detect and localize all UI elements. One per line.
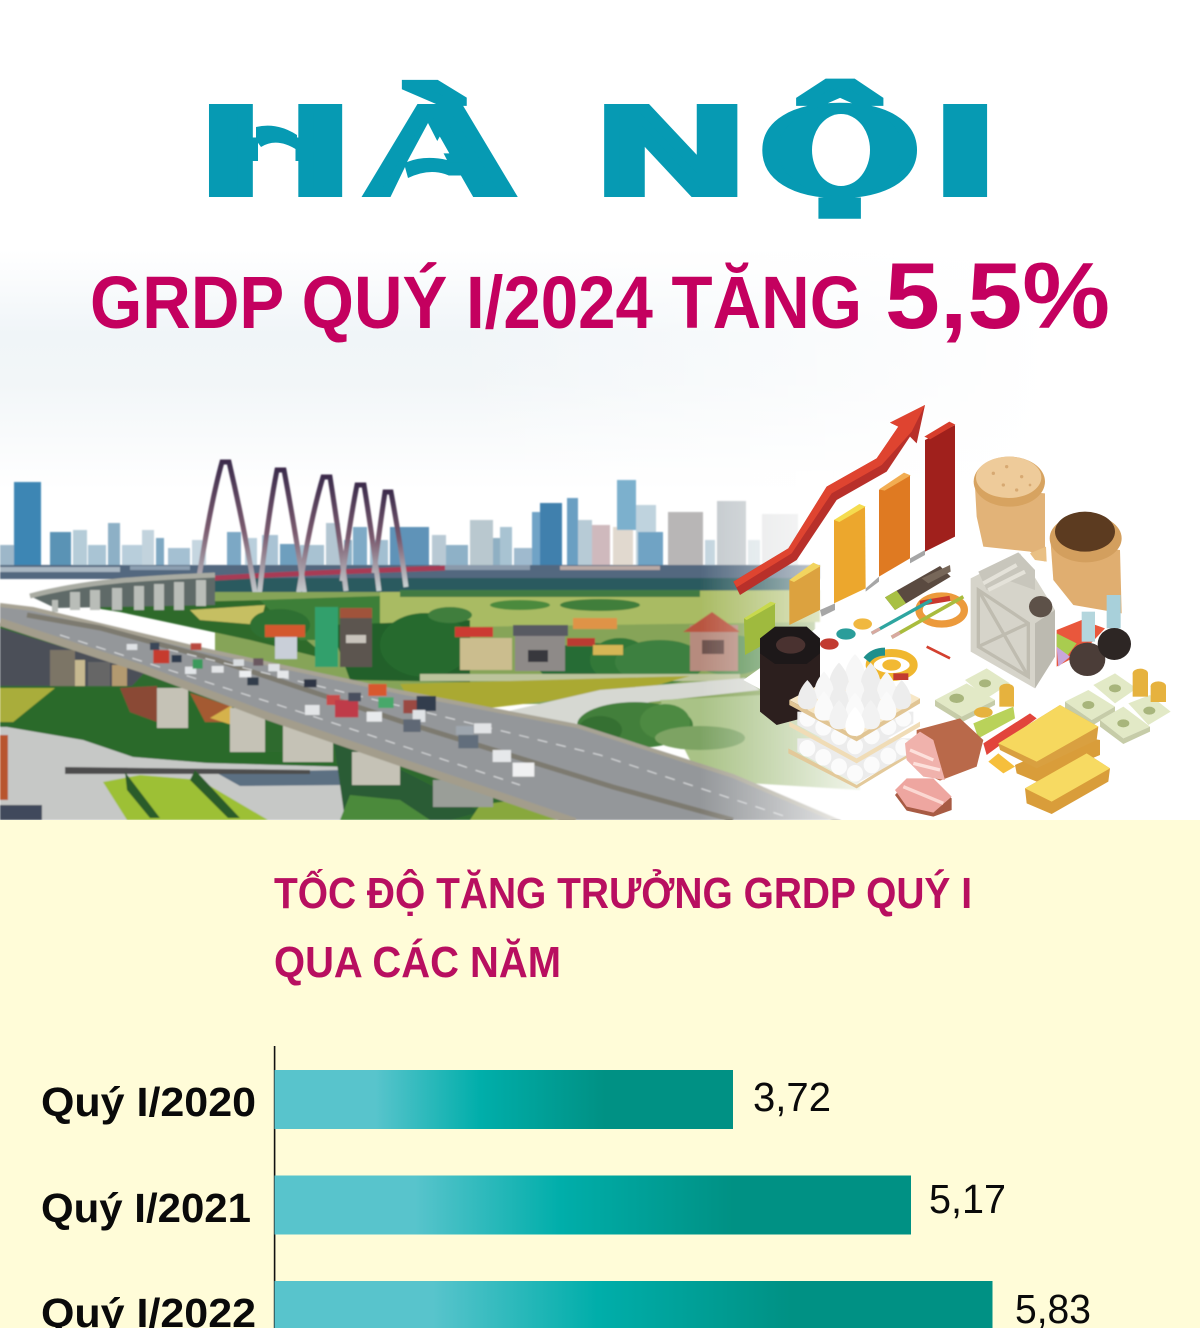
chart heading: QUA CÁC NĂM: [274, 937, 561, 987]
low-rise city band: [0, 565, 820, 594]
red growth arrow: [733, 405, 925, 595]
O counter opening: [779, 104, 903, 196]
pie chart card: [1057, 620, 1105, 667]
main highway deck: [0, 606, 835, 820]
bar 2021: Quý I/2021: [41, 1185, 251, 1231]
sack of grain: [974, 457, 1047, 562]
bridge deck: [150, 568, 445, 582]
H arched crossbar: [256, 98, 297, 200]
bar 2020: Quý I/2020: [41, 1079, 256, 1125]
highway pillars: [157, 688, 493, 807]
black rubber cylinder: [760, 627, 820, 725]
growth figure: 5,5%: [885, 243, 1110, 348]
bar 2020: [41, 1070, 831, 1129]
curved elevated viaduct: [30, 575, 215, 612]
yellow field and curved side road: [400, 676, 860, 790]
gold coins: [974, 669, 1166, 718]
sack of coffee: [1050, 512, 1122, 613]
cars on highway: [127, 643, 394, 722]
tray of eggs: [788, 654, 920, 788]
bar 2022: [41, 1281, 1091, 1328]
panel: growth chart: [0, 820, 1200, 1328]
growth bars: [744, 422, 955, 655]
bar 2021: [41, 1176, 1006, 1234]
coloured strips: [973, 707, 1037, 773]
jerry can: [971, 552, 1055, 688]
chart heading: TỐC ĐỘ TĂNG TRƯỞNG GRDP QUÝ I: [274, 867, 972, 918]
bar 2020: 3,72: [753, 1074, 831, 1120]
donut chart: [867, 647, 950, 677]
cars on highway right section: [403, 696, 534, 777]
paper sheet: [743, 533, 1137, 800]
subtitle: GRDP QUÝ I/2024 TĂNG: [90, 261, 862, 344]
A counter cutout: [390, 123, 465, 198]
background haze sky: [0, 0, 1200, 820]
green fields and trees: [75, 590, 820, 704]
bar 2021: 5,17: [929, 1176, 1006, 1222]
highway parapets and lanes: [0, 605, 840, 822]
panel: city photo with bridge and highway: [0, 462, 890, 822]
title: HÀ NỘI: [203, 83, 993, 219]
ham and slice: [895, 718, 983, 817]
money stacks: [935, 668, 1171, 744]
fade overlay right side: [700, 470, 890, 820]
gold bars: [998, 705, 1110, 814]
chart heading: [274, 867, 972, 987]
Nhat Tan bridge pylons: [197, 462, 406, 598]
chemistry flasks: [1069, 595, 1131, 676]
ground under highway: [0, 625, 575, 820]
illustration: economy isometric: [733, 405, 1171, 817]
chart axis: [274, 1046, 275, 1328]
subtitle: [90, 243, 1110, 348]
skyline buildings: [0, 480, 798, 568]
marker and pencils: [872, 565, 964, 637]
roadside houses: [265, 607, 740, 671]
chart dots: [820, 618, 872, 650]
